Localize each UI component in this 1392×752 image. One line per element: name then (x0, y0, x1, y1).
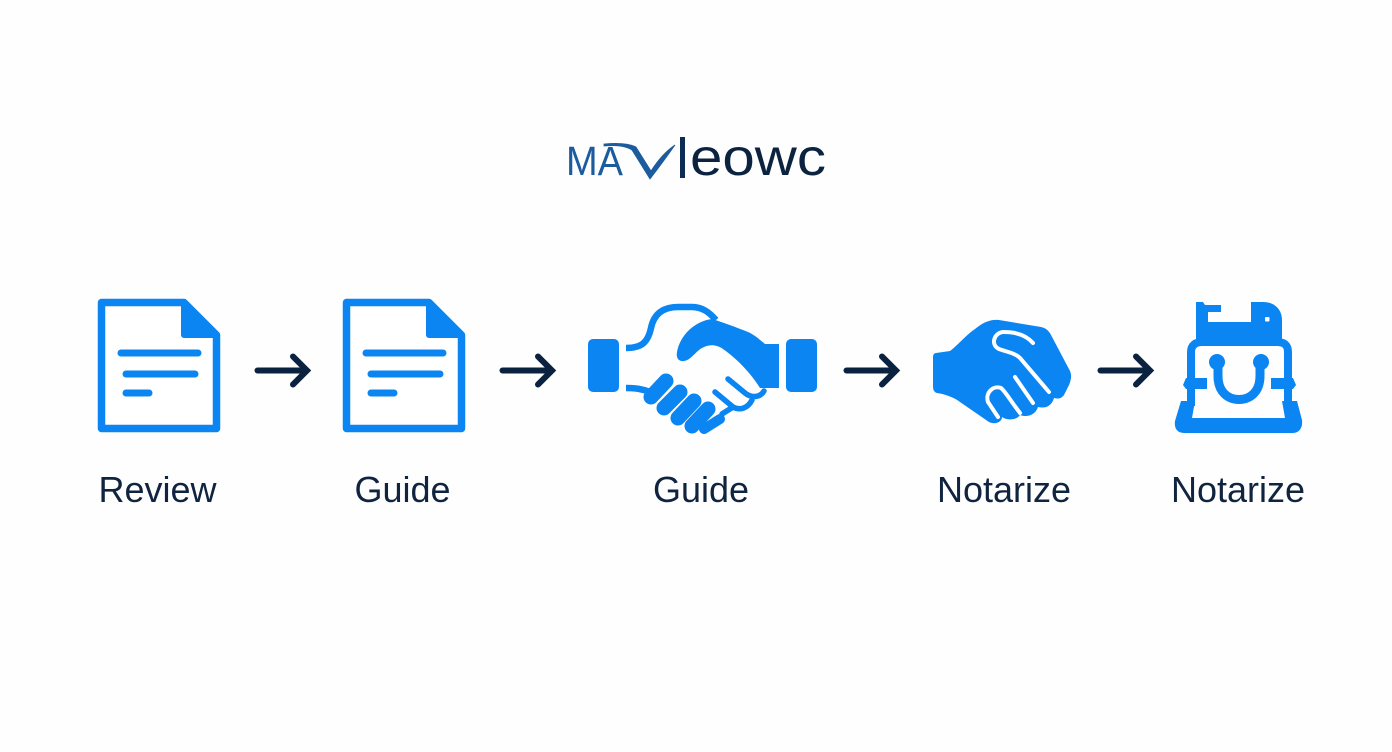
icon: document (102, 302, 217, 428)
icon: solid handshake (933, 320, 1071, 423)
label: Notarize: Notarize (1171, 469, 1305, 510)
logo letters MA: MA (566, 138, 624, 184)
icon: bag with stamp (1175, 302, 1302, 433)
step 5: notarize (1171, 302, 1305, 510)
logo V swoosh (604, 143, 675, 179)
label: Guide: Guide (653, 469, 749, 510)
logo letters eowc: eowc (690, 129, 826, 187)
arrow 3 (846, 356, 896, 384)
step 1: review (98, 302, 218, 510)
step 3: guide (588, 307, 817, 510)
label: Notarize: Notarize (937, 469, 1071, 510)
step 4: notarize (933, 320, 1071, 510)
logo divider bar (680, 137, 685, 178)
arrow 4 (1100, 356, 1150, 384)
icon: document (346, 302, 462, 428)
step 2: guide (346, 302, 462, 510)
logo (566, 129, 826, 187)
arrow 1 (258, 356, 307, 384)
label: Guide: Guide (354, 469, 451, 510)
label: Review: Review (98, 469, 218, 510)
arrow 2 (502, 356, 552, 384)
icon: outlined handshake (588, 307, 817, 429)
